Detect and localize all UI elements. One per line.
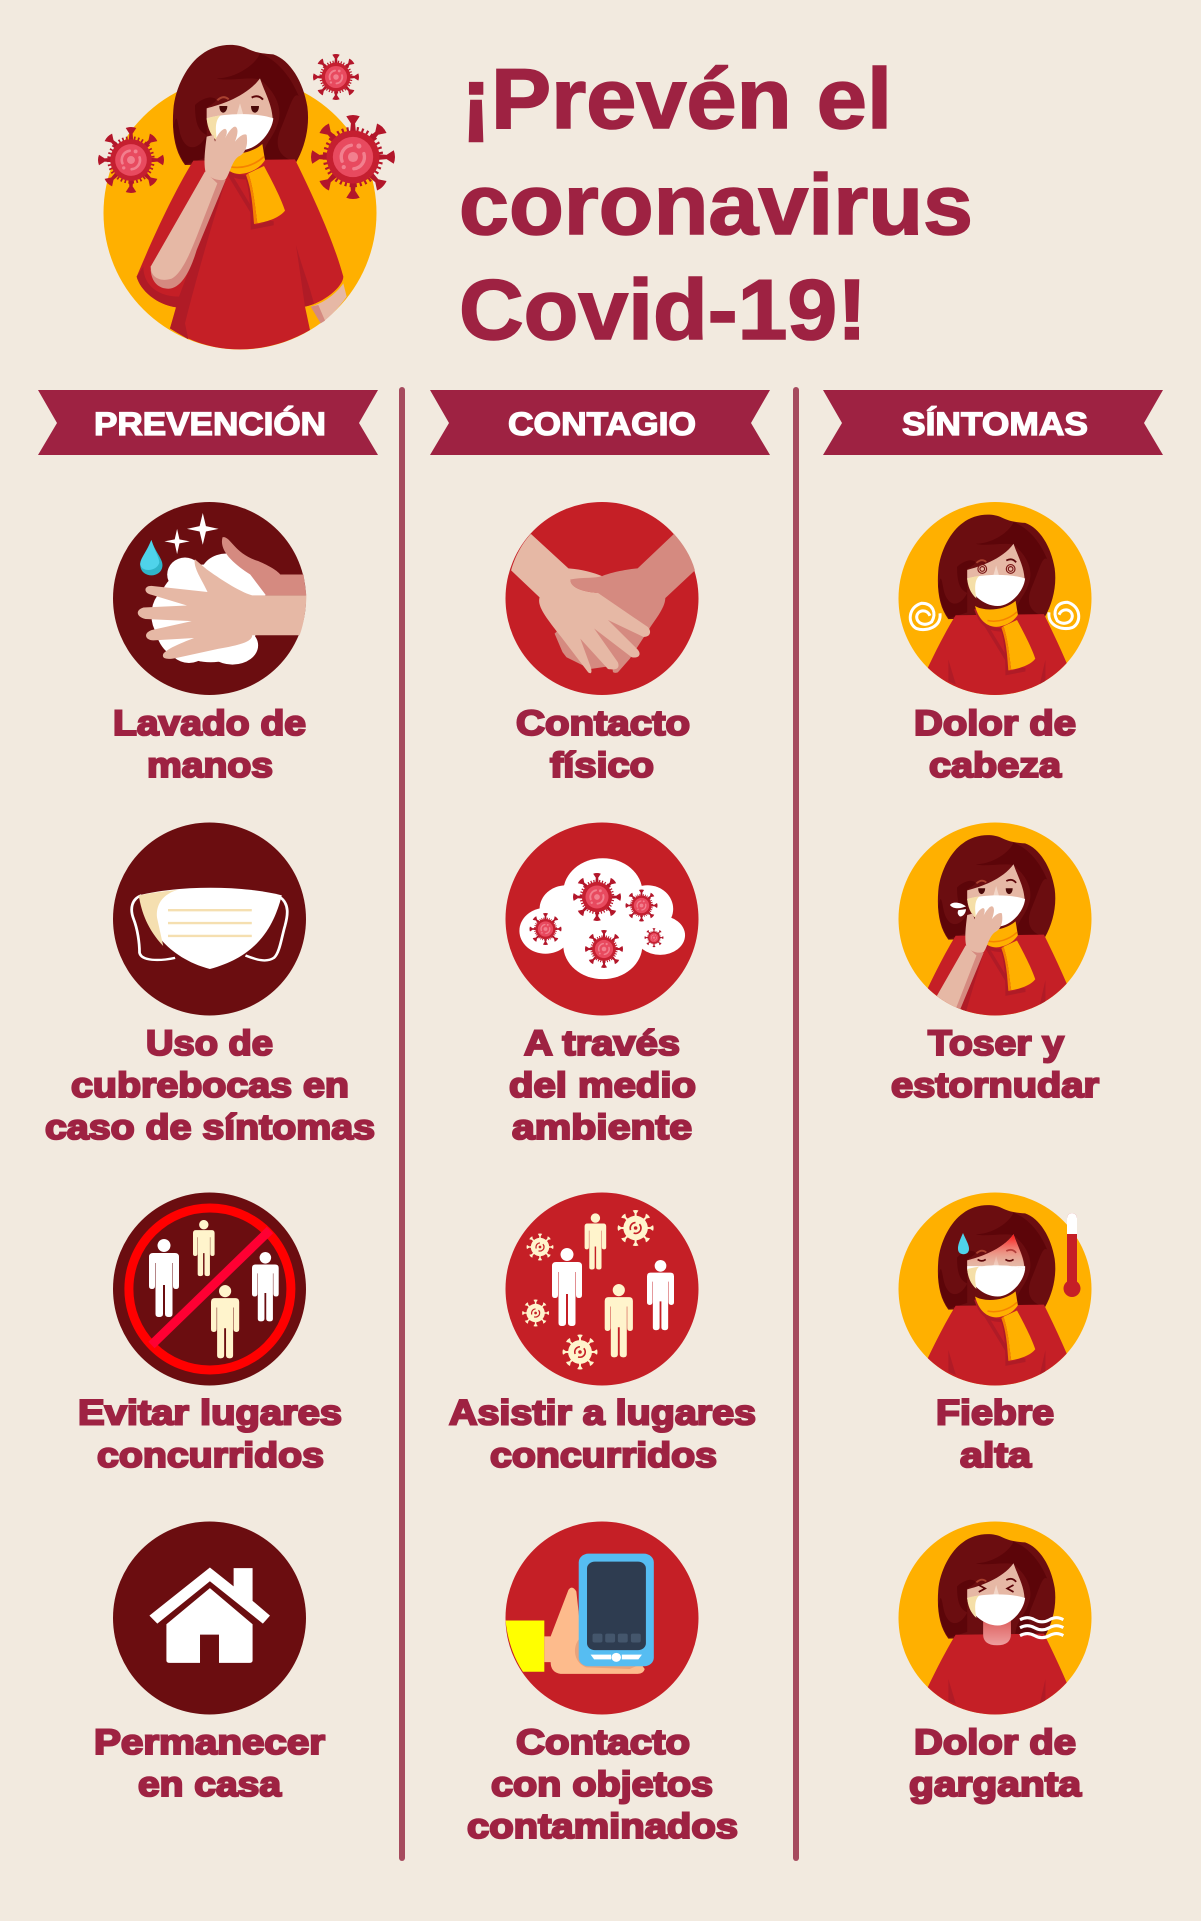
label: con objetos [491, 1765, 713, 1804]
label: Contacto [516, 704, 690, 743]
label: Lavado de [113, 704, 306, 743]
label: Evitar lugares [78, 1394, 342, 1432]
woman coughing [137, 45, 347, 349]
item: dolor de cabeza [898, 502, 1092, 785]
label: Contacto [516, 1723, 690, 1762]
item: permanecer en casa [94, 1522, 325, 1804]
label [449, 1394, 756, 1475]
icon: prohibited crowd [129, 1208, 291, 1370]
label: A través [524, 1024, 680, 1063]
title: coronavirus [459, 158, 973, 253]
label: cubrebocas en [71, 1066, 349, 1105]
panel: contagio [430, 390, 770, 1846]
label [914, 704, 1076, 785]
icon: droplets [950, 903, 966, 917]
label [78, 1394, 342, 1475]
item: contacto físico [506, 502, 698, 785]
icon: holding hands [511, 534, 695, 673]
icon: heat waves [1020, 1618, 1063, 1638]
icon: washing hands [138, 513, 306, 665]
label: Dolor de [914, 704, 1076, 743]
icon: house [149, 1567, 270, 1663]
icon: dizzy spirals [910, 602, 1079, 630]
label: Fiebre [936, 1394, 1054, 1432]
banner: contagio: CONTAGIO [508, 406, 696, 442]
icon: thermometer [1064, 1213, 1080, 1297]
title: Covid-19! [459, 263, 867, 358]
label: Permanecer [94, 1723, 325, 1762]
icon: face mask [132, 888, 287, 969]
icon: woman dizzy [928, 514, 1067, 695]
label: ambiente [512, 1108, 692, 1147]
label: Dolor de [914, 1723, 1076, 1762]
icon: hand holding phone [506, 1554, 654, 1674]
label: en casa [138, 1765, 282, 1804]
label: cabeza [929, 746, 1062, 785]
label [45, 1024, 375, 1147]
label: estornudar [891, 1066, 1099, 1105]
label: caso de síntomas [45, 1108, 375, 1147]
label [94, 1723, 325, 1804]
hero illustration: woman with mask and viruses [98, 45, 395, 350]
icon: woman coughing [928, 835, 1067, 1016]
title [459, 52, 973, 358]
label: Uso de [146, 1024, 273, 1063]
label: manos [147, 746, 273, 785]
label [113, 704, 306, 785]
icon: woman with fever [928, 1205, 1067, 1386]
label [936, 1394, 1054, 1475]
icon: sweat drop [958, 1233, 969, 1254]
banner: contagio [430, 390, 770, 455]
label: alta [960, 1436, 1032, 1475]
column divider left [399, 387, 405, 1861]
item: contacto con objetos contaminados [467, 1522, 738, 1846]
virus top [313, 54, 359, 100]
label: físico [550, 746, 654, 785]
label: Asistir a lugares [449, 1394, 756, 1432]
banner: síntomas [823, 390, 1163, 455]
label [909, 1723, 1082, 1804]
label: concurridos [97, 1436, 324, 1475]
icon: virus cloud [519, 858, 685, 979]
virus right [311, 115, 395, 199]
label [509, 1024, 696, 1147]
item: asistir a lugares concurridos [449, 1192, 756, 1475]
item: evitar lugares concurridos [78, 1192, 342, 1475]
banner: síntomas: SÍNTOMAS [902, 406, 1088, 442]
label: Toser y [928, 1024, 1065, 1063]
label: del medio [509, 1066, 696, 1105]
label: garganta [909, 1765, 1082, 1804]
item: uso de cubrebocas [45, 822, 375, 1147]
title: ¡Prevén el [461, 52, 892, 147]
column divider right [793, 387, 799, 1861]
label [891, 1024, 1099, 1105]
virus left [98, 127, 164, 193]
label: contaminados [467, 1807, 738, 1846]
label: concurridos [490, 1436, 717, 1475]
item: lavado de manos [113, 502, 306, 785]
label [467, 1723, 738, 1846]
label [516, 704, 690, 785]
item: dolor de garganta [898, 1522, 1092, 1804]
icon: woman with sore throat [928, 1534, 1067, 1714]
panel: síntomas [823, 390, 1163, 1804]
item: toser y estornudar [891, 822, 1099, 1105]
banner: prevención: PREVENCIÓN [94, 406, 326, 442]
item: fiebre alta [898, 1192, 1092, 1475]
item: a través del medio ambiente [506, 822, 698, 1147]
banner: prevención [38, 390, 378, 455]
icon: crowd with viruses [522, 1210, 674, 1370]
panel: prevención [38, 390, 378, 1804]
